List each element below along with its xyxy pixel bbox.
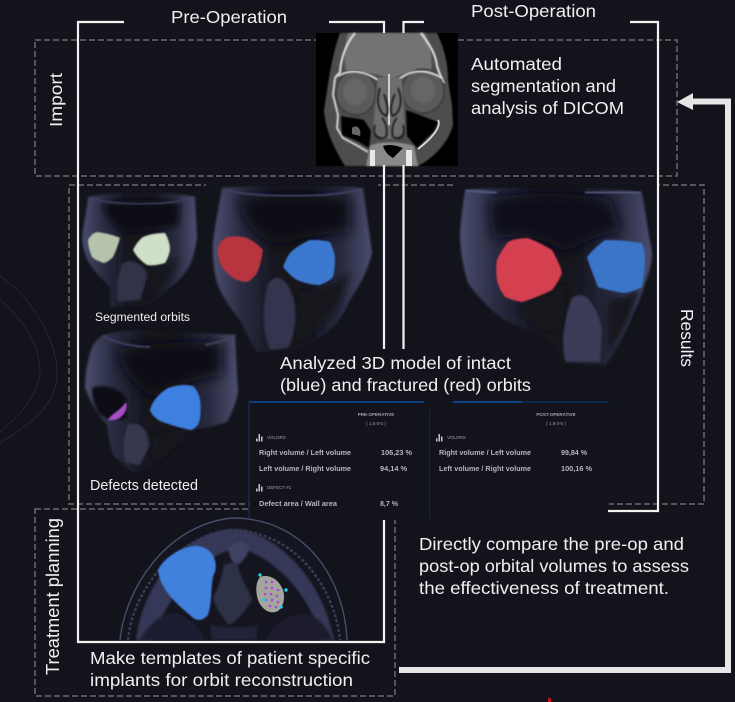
post-operative column: ( 1.9.0-0 ) — [546, 421, 566, 426]
text: compare volumes: Directly compare the pre-op and — [419, 534, 684, 554]
orbit: post-op blue — [587, 240, 645, 293]
post-operative column: Left volume / Right volume — [439, 466, 531, 473]
label: import: Import — [46, 73, 66, 127]
icon: bars — [436, 434, 442, 442]
post-operative column — [436, 412, 593, 473]
text: automated segmentation: analysis of DICOM — [471, 98, 624, 118]
red mark at bottom edge — [548, 698, 551, 702]
heading: pre-operation: Pre-Operation — [171, 7, 287, 27]
white bracket: pre-operation — [78, 22, 384, 642]
CT orbits — [336, 71, 376, 115]
text: make templates — [90, 648, 370, 690]
skull: analyzed post-operation — [460, 187, 652, 365]
text: compare volumes: the effectiveness of treatment. — [419, 578, 669, 598]
background arcs — [0, 276, 57, 443]
icon: bars — [256, 434, 262, 442]
pre-operative column: Right volume / Left volume — [259, 450, 351, 457]
pre-operative column — [256, 412, 413, 508]
heading: post-operation: Post-Operation — [471, 1, 596, 21]
white bracket: post-operation — [404, 22, 658, 511]
axial skull image — [120, 518, 347, 640]
implant template — [256, 573, 288, 612]
text: analyzed 3D model: (blue) and fractured (red) orbits — [280, 375, 531, 395]
skull: defects detected — [85, 330, 238, 473]
feedback arrow — [399, 93, 728, 670]
orbit: blue intact — [150, 385, 201, 430]
results table panel — [248, 401, 609, 520]
pre-operative column: ( 1.9.0-0 ) — [366, 421, 386, 426]
orbit: fractured red — [218, 236, 263, 282]
post-operative column: Right volume / Left volume — [439, 450, 531, 457]
pre-operative column: DEFECT #1 — [267, 485, 292, 490]
skull: segmented orbits — [82, 192, 197, 307]
pre-operative column: Defect area / Wall area — [259, 501, 337, 508]
pre-operative column: 106,23 % — [381, 450, 413, 457]
text: defects detected label: Defects detected — [90, 478, 198, 494]
skull: analyzed pre-operation — [213, 186, 372, 352]
panel: results dashed frame — [69, 185, 704, 504]
text: compare volumes: post-op orbital volumes to assess — [419, 556, 689, 576]
orbit: right segmented — [133, 233, 170, 265]
defect: purple — [108, 403, 127, 420]
pre-operative column: 94,14 % — [380, 466, 408, 473]
CT nasal cavity — [373, 77, 405, 139]
orbit: intact blue — [283, 240, 335, 285]
text: automated segmentation — [471, 54, 624, 118]
text: compare volumes — [419, 534, 689, 598]
orbit: post-op red — [496, 238, 562, 302]
panel: import dashed frame — [35, 40, 677, 176]
post-operative column: 99,84 % — [561, 450, 588, 457]
text: automated segmentation: Automated — [471, 54, 562, 74]
CT sinuses — [341, 116, 371, 148]
pre-operative column: PRE-OPERATIVE — [358, 412, 394, 417]
text: automated segmentation: segmentation and — [471, 76, 616, 96]
label: results: Results — [677, 309, 697, 367]
pre-operative column: VOLORS — [267, 435, 286, 440]
panel: treatment planning dashed frame — [35, 509, 395, 696]
pre-operative column: Left volume / Right volume — [259, 466, 351, 473]
text: analyzed 3D model: Analyzed 3D model of intact — [280, 353, 511, 373]
ethmoid — [214, 563, 252, 625]
text: analyzed 3D model — [280, 353, 531, 395]
CT scan image — [316, 33, 458, 166]
text: segmented orbits label: Segmented orbits — [95, 312, 190, 324]
pre-operative column: 8,7 % — [380, 501, 399, 508]
post-operative column: 100,16 % — [561, 466, 593, 473]
label: treatment planning: Treatment planning — [43, 518, 63, 675]
icon: bars — [256, 484, 262, 492]
mask over results frame top — [206, 182, 378, 188]
text: make templates: implants for orbit reconstruction — [90, 670, 353, 690]
text: make templates: Make templates of patient specific — [90, 648, 370, 668]
post-operative column: VOLORS — [447, 435, 466, 440]
orbit: left segmented — [88, 232, 120, 263]
orbit: axial blue — [158, 546, 216, 620]
post-operative column: POST-OPERATIVE — [536, 412, 576, 417]
